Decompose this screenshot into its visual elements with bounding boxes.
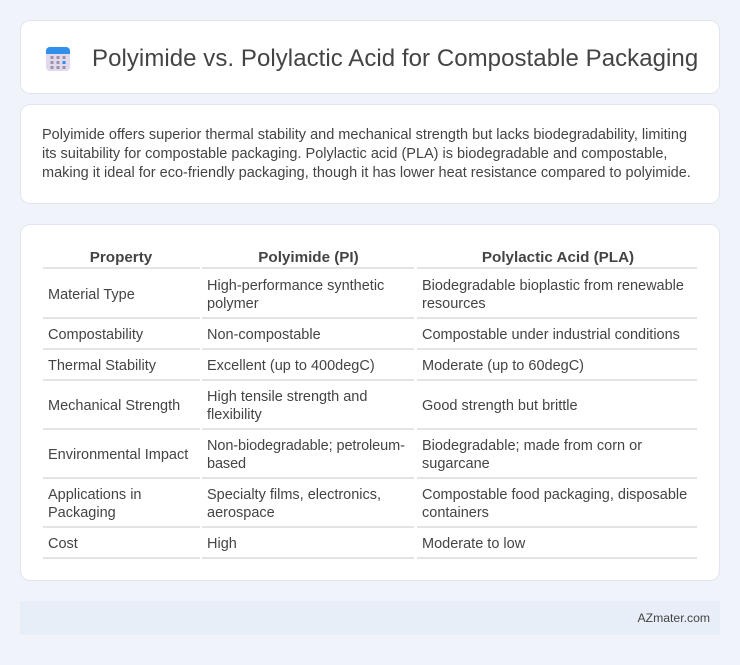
row: compostability: Compostable under industrial conditions [422,327,680,343]
row: material type: Biodegradable bioplastic from renewable [422,278,684,294]
row: environmental impact: Non-biodegradable; petroleum- [207,438,405,454]
row: mechanical strength: Good strength but brittle [422,398,578,414]
row: cost: Moderate to low [422,536,525,552]
row: cost [48,536,526,552]
row: applications in packaging: Compostable food packaging, disposable [422,487,687,503]
row: applications in packaging: Applications in [48,487,142,503]
row: mechanical strength: Mechanical Strength [48,398,180,414]
summary text [42,127,691,181]
row: applications in packaging: Packaging [48,505,116,521]
row: environmental impact: Environmental Impact [48,447,188,463]
row: compostability: Compostability [48,327,143,343]
row: material type: resources [422,296,486,312]
row: cost: High [207,536,237,552]
row: mechanical strength [48,389,578,423]
row: thermal stability: Excellent (up to 400degC) [207,358,375,374]
footer bar [20,601,720,635]
row: compostability: Non-compostable [207,327,321,343]
row: applications in packaging [48,487,687,521]
summary card [20,104,720,204]
row: material type: High-performance synthetic [207,278,384,294]
row: environmental impact: Biodegradable; made from corn or [422,438,642,454]
title: Polyimide vs. Polylactic Acid for Compostable Packaging [92,45,698,72]
summary text: Polyimide offers superior thermal stability and mechanical strength but lacks biodegradability, limiting [42,127,687,143]
title card [20,20,720,94]
row: mechanical strength: flexibility [207,407,262,423]
row: applications in packaging: containers [422,505,489,521]
table card [20,224,720,581]
footer brand: AZmater.com [638,611,710,625]
row: compostability [48,327,680,343]
summary text: its suitability for compostable packaging. Polylactic acid (PLA) is biodegradable and compostable, [42,146,667,162]
row: thermal stability: Moderate (up to 60degC) [422,358,584,374]
row: environmental impact: based [207,456,246,472]
header row: Polylactic Acid (PLA) [482,249,634,266]
row: cost: Cost [48,536,78,552]
row: material type: polymer [207,296,259,312]
header row: Polyimide (PI) [258,249,359,266]
row: mechanical strength: High tensile strength and [207,389,367,405]
row: material type [48,278,684,312]
row: environmental impact [48,438,642,472]
row: material type: Material Type [48,287,135,303]
row: thermal stability [48,358,584,374]
header row: Property [90,249,152,266]
row: applications in packaging: Specialty films, electronics, [207,487,381,503]
header row [90,249,634,266]
icon: calendar [46,47,70,71]
row: applications in packaging: aerospace [207,505,275,521]
row: thermal stability: Thermal Stability [48,358,156,374]
row: environmental impact: sugarcane [422,456,490,472]
summary text: making it ideal for eco-friendly packaging, though it has lower heat resistance compared to polyimide. [42,165,691,181]
